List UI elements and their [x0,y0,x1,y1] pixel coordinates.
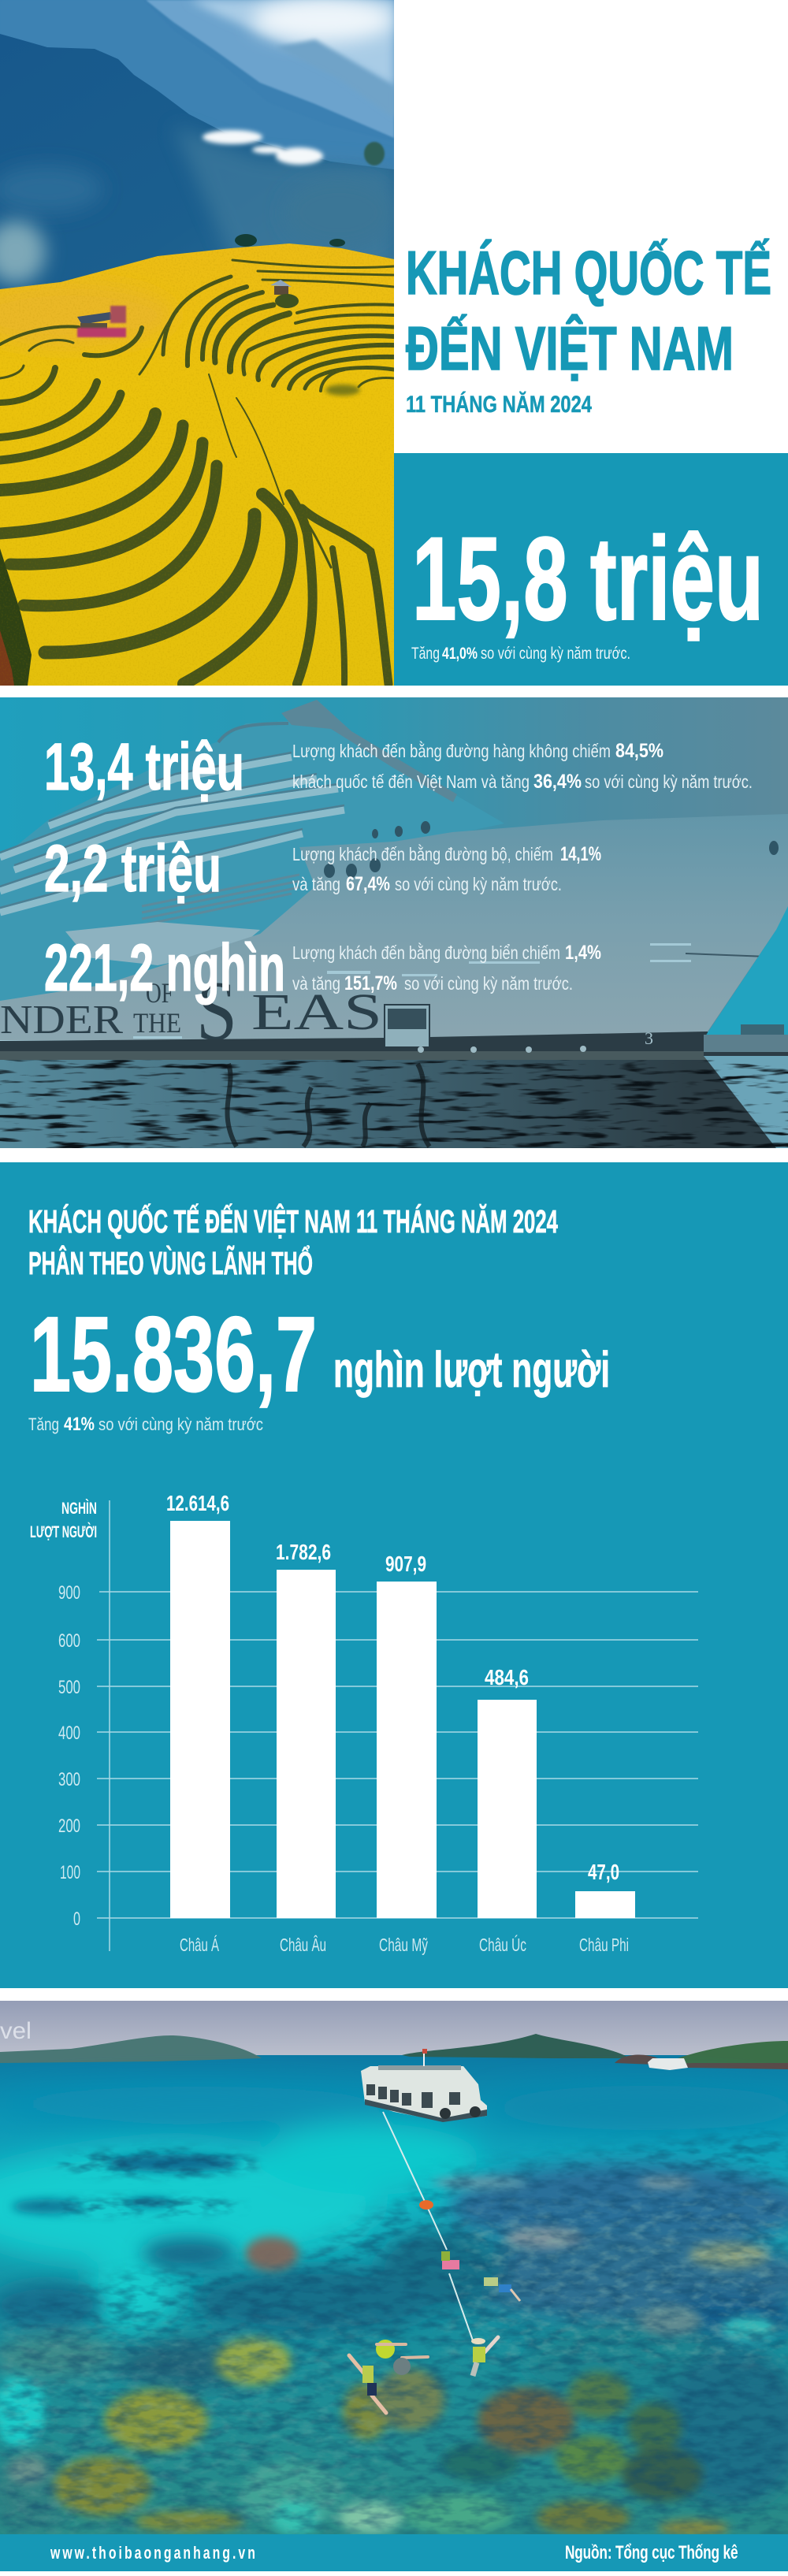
second boat [648,2058,688,2070]
stat: by sea [44,931,601,1005]
mountains and mist [0,0,394,299]
bar: Châu Á: Châu Á [180,1935,219,1955]
huts and visitors [77,280,299,337]
y axis labels: 300 [58,1769,80,1790]
bar: Châu Úc [478,1665,537,1955]
panel heading: PHÂN THEO VÙNG LÃNH THỔ [28,1244,313,1281]
panel heading [28,1203,558,1281]
total figure: nghìn lượt người [333,1341,610,1398]
bright shallows [0,2086,788,2333]
balconies [327,943,691,976]
stat: by air: 36,4% [533,771,582,793]
stat: by road: 67,4% [346,873,390,895]
y axis labels: 200 [58,1816,80,1837]
y axis labels: 500 [58,1677,80,1698]
y axis title [30,1500,97,1541]
y axis labels: 600 [58,1630,80,1652]
bar: Châu Á [166,1491,230,1955]
bar chart [30,1491,698,1955]
bar: Châu Á: 12.614,6 [166,1491,229,1515]
stat: by sea: 151,7% [344,972,397,994]
stat: by air: 84,5% [615,740,663,762]
ship name painted on hull: OF [146,977,173,1009]
ship name painted on hull [2,983,378,1039]
stat: by road [44,831,601,905]
stat: by road: 14,1% [560,843,601,865]
grain [0,236,394,686]
y axis title: NGHÌN [61,1500,97,1518]
stat: by road: 2,2 triệu [44,831,221,905]
y axis labels: 400 [58,1723,80,1744]
stat: by sea: so với cùng kỳ năm trước. [404,973,573,994]
bar: Châu Mỹ: 907,9 [385,1552,426,1576]
stat: by road: Lượng khách đến bằng đường bộ, chiếm [292,844,553,864]
source: Nguồn: Tổng cục Thống kê [565,2542,738,2563]
stat: by air: khách quốc tế đến Việt Nam và tăng [292,771,530,792]
stat: by air: 13,4 triệu [44,730,244,804]
stat: by sea: và tăng [292,973,340,994]
stat: by air: Lượng khách đến bằng đường hàng không chiếm [292,741,611,761]
stat: by sea: 1,4% [565,942,601,964]
growth note: so với cùng kỳ năm trước. [481,645,630,663]
dark reef patches [0,2163,788,2530]
y axis labels [58,1582,80,1930]
snorkelers [349,2251,520,2413]
bar: Châu Phi: 47,0 [588,1860,619,1884]
growth note: so với cùng kỳ năm trước [98,1414,263,1434]
tow rope and float [383,2112,473,2340]
photo: snorkelers over coral reef [0,2001,788,2537]
bar: Châu Âu: 1.782,6 [276,1540,331,1564]
panel: cruise ship photo with arrival modes: 3 [645,1028,653,1048]
growth note: Tăng [28,1414,59,1434]
panel: total arrivals [394,453,788,686]
stat: by sea: 221,2 nghìn [44,931,285,1005]
islands [0,2034,788,2069]
reef texture [0,2128,788,2537]
ship name painted on hull: EAS [251,983,382,1041]
ship name painted on hull: S [196,965,237,1058]
growth note [411,645,630,663]
growth note: Tăng [411,645,440,663]
portholes [324,821,779,878]
coral heads [8,2176,776,2536]
panel: cruise ship photo with arrival modes [0,697,788,1148]
hull door [385,1005,429,1047]
terrace field [0,236,394,686]
y axis labels: 0 [73,1909,80,1930]
ship superstructure [0,700,504,1001]
ship name painted on hull: NDER [0,998,123,1043]
stat: by road: và tăng [292,874,340,894]
dark field corner [0,548,32,686]
bar: Châu Phi: Châu Phi [579,1935,629,1955]
bar: Châu Úc: 484,6 [485,1665,529,1689]
growth note [28,1414,263,1435]
y axis labels: 900 [58,1582,80,1604]
teal water beyond bow [705,906,788,1036]
tour boat [361,2049,688,2122]
y axis title: LƯỢT NGƯỜI [30,1522,97,1541]
website: www.thoibaonganhang.vn [50,2544,255,2563]
bar: Châu Mỹ: Châu Mỹ [379,1935,428,1955]
title [406,238,771,418]
growth note: 41% [64,1414,95,1435]
waterline band [0,1032,708,1051]
ship hull [0,814,788,1048]
stat: by air [44,730,753,804]
watermark fragment: vel [0,2018,32,2044]
bar: Châu Mỹ [377,1552,437,1955]
title: 11 THÁNG NĂM 2024 [406,391,592,418]
y axis labels: 100 [60,1862,80,1883]
bar: Châu Phi [575,1860,635,1955]
photo: rice terraces and mountains [0,0,394,686]
growth note: 41,0% [442,645,478,663]
water [0,1060,788,1148]
bar: Châu Úc: Châu Úc [479,1935,526,1955]
bar: Châu Âu: Châu Âu [280,1935,326,1955]
stat: by sea: Lượng khách đến bằng đường biển chiếm [292,942,560,963]
hull mooring line [686,953,760,957]
bar: Châu Âu [276,1540,336,1955]
dock [704,1035,788,1054]
ship name painted on hull: THE [133,1007,181,1039]
panel: arrivals by region [0,1162,788,1988]
stat: by road: so với cùng kỳ năm trước. [395,874,562,894]
footer bar [0,2534,788,2571]
total figure: 15.836,7 [30,1295,317,1414]
